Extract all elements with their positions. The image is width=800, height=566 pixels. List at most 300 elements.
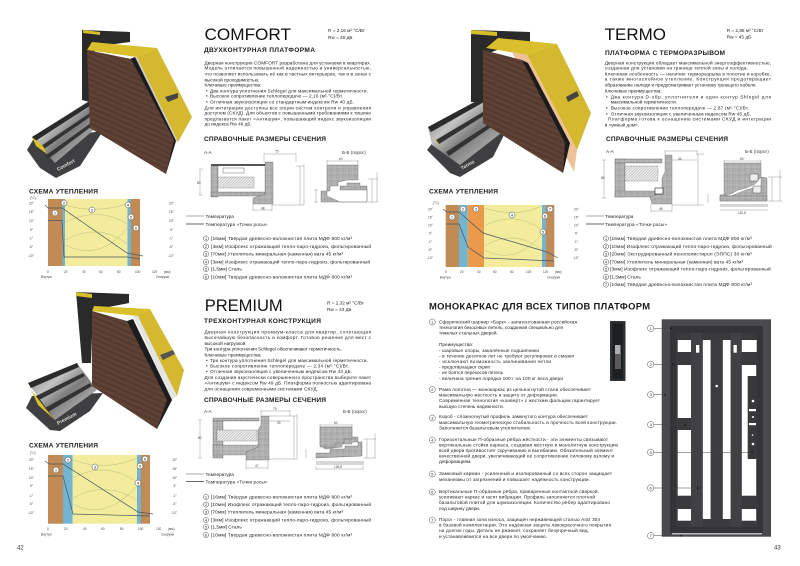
section drawing B-B threshold: 60 bbox=[334, 421, 338, 425]
layers list: 5 bbox=[205, 266, 208, 272]
numbered descriptions: Рама полотна — монокаркас из цельногнутой стали обеспечивает bbox=[439, 386, 592, 392]
door cutaway photo: COMFORT: Comfort bbox=[56, 158, 76, 173]
insulation chart: 5° bbox=[174, 484, 177, 488]
insulation chart: -5° bbox=[574, 248, 579, 252]
section drawing A-A: 79 bbox=[273, 407, 277, 411]
layers list: 2 bbox=[205, 502, 208, 507]
layers list: [10мм] Твёрдая древесно-волокнистая плита МДФ 800 кг/м³ bbox=[211, 275, 352, 281]
description text: Ключевая особенность — наличие терморазрыва в полотне и коробке, bbox=[605, 72, 771, 76]
numbered descriptions: высшую степень надежности. bbox=[439, 404, 504, 409]
section drawing B-B threshold: 116,8 bbox=[738, 211, 746, 215]
layers list: 5 bbox=[605, 266, 608, 272]
insulation chart: Внутри bbox=[41, 532, 52, 536]
numbered descriptions: Вертикальные П-образные рёбра, приваренные контактной сваркой, bbox=[439, 488, 599, 494]
layers list: [10мм] Изофлекс отражающий тепло-паро-гидроиз, фольгированный bbox=[610, 243, 772, 250]
section heading: СПРАВОЧНЫЕ РАЗМЕРЫ СЕЧЕНИЯ bbox=[204, 136, 326, 143]
insulation chart: 4 bbox=[137, 480, 140, 486]
insulation chart: 15° bbox=[169, 210, 175, 214]
insulation chart: 15° bbox=[574, 216, 580, 220]
thermal and acoustic values: Rw = 45 дБ bbox=[727, 34, 751, 40]
insulation chart: 6 bbox=[144, 456, 147, 462]
layers list bbox=[203, 236, 371, 281]
numbered descriptions: деформациям. bbox=[439, 459, 472, 464]
insulation chart: 40 bbox=[83, 527, 87, 531]
section drawing B-B threshold: 60 bbox=[339, 157, 343, 161]
section drawing B-B threshold: Б-Б (порог) bbox=[745, 149, 769, 154]
description text: Для интеграции доступны все опции систем контроля и управления bbox=[204, 106, 371, 110]
layers list: [10мм] Твёрдая древесно-волокнистая плита МДФ 800 кг/м³ bbox=[211, 533, 352, 539]
insulation chart: 20° bbox=[428, 208, 434, 212]
insulation chart: 2 bbox=[462, 206, 465, 212]
numbered descriptions: в базовой комплектации. Это надёжная защита лакокрасочного покрытия bbox=[439, 522, 611, 528]
insulation chart: 1 bbox=[54, 210, 57, 216]
description text: • bbox=[206, 358, 208, 363]
numbered descriptions: Порог - главная зона износа, защищён нержавеющей сталью AISI 304 bbox=[439, 516, 600, 522]
layers list: 1 bbox=[205, 236, 208, 241]
callouts: 5 bbox=[650, 450, 653, 455]
insulation chart: 20° bbox=[29, 458, 35, 462]
layers list: 3 bbox=[605, 252, 608, 256]
legend bbox=[186, 214, 268, 227]
insulation chart: Снаружи bbox=[156, 275, 169, 279]
layers list: [70мм] Утеплитель минеральная (каменная) вата 45 кг/м³ bbox=[211, 510, 343, 516]
insulation chart: -5° bbox=[169, 245, 174, 249]
description text: • bbox=[606, 106, 608, 110]
section heading: СПРАВОЧНЫЕ РАЗМЕРЫ СЕЧЕНИЯ bbox=[204, 397, 326, 404]
legend bbox=[586, 214, 667, 227]
description text: Высокое сопротивление теплопередаче — 2,87 (м²·°C)/Вт. bbox=[611, 106, 749, 110]
insulation chart: -1° bbox=[29, 236, 34, 240]
insulation chart: (°C) bbox=[30, 451, 36, 455]
insulation chart: 15° bbox=[172, 467, 178, 471]
section drawing B-B threshold bbox=[306, 409, 376, 470]
insulation chart: 15° bbox=[29, 467, 35, 471]
insulation chart: -1° bbox=[428, 240, 433, 244]
panel: PREMIUM platform bbox=[17, 292, 376, 552]
numbered descriptions: - в течение десятков лет не требуют регулировок и смазки bbox=[439, 354, 574, 358]
insulation chart bbox=[427, 201, 580, 280]
numbered descriptions: тяжелых стальных дверей. bbox=[439, 330, 498, 336]
section drawing B-B threshold: 126,8 bbox=[334, 465, 342, 469]
insulation chart: Внутри bbox=[41, 275, 52, 279]
insulation chart: (мм) bbox=[168, 527, 175, 531]
section drawing B-B threshold bbox=[314, 150, 378, 202]
insulation chart: 5 bbox=[130, 214, 133, 220]
description text: в «умный дом». bbox=[605, 122, 639, 128]
description text: Два контура уплотнения Schlegel для максимальной герметичности. bbox=[210, 88, 368, 94]
door cutaway photo: TERMO: Termo bbox=[460, 159, 476, 172]
door cutaway photo: PREMIUM bbox=[26, 292, 184, 431]
legend bbox=[186, 472, 268, 484]
description text: Отличная звукоизоляция с увеличенным индексом Rw 43 дБ. bbox=[210, 369, 352, 374]
description text: • bbox=[606, 94, 608, 100]
description text: Для создания акустически совершенного пространства выберите пакет bbox=[204, 375, 372, 380]
numbered descriptions: Короб - сложногнутый профиль замкнутого контура обеспечивает bbox=[439, 413, 589, 419]
numbered descriptions: всей двери противостоят скручиванию и выгибанию. Обязательный элемент bbox=[439, 447, 614, 453]
title: TERMO bbox=[605, 25, 666, 44]
insulation chart: 20° bbox=[172, 458, 178, 462]
insulation chart: 3 bbox=[94, 464, 97, 470]
insulation chart: (°C) bbox=[433, 201, 439, 205]
section drawing A-A: 47 bbox=[255, 464, 259, 468]
insulation chart: 10° bbox=[29, 219, 35, 223]
layers list: [1,5мм] Сталь bbox=[211, 525, 242, 531]
subtitle: ТРЕХКОНТУРНАЯ КОНСТРУКЦИЯ bbox=[204, 318, 321, 325]
description text: доступом (СКУД). Для объектов с повышенными требованиями к тишине bbox=[204, 110, 371, 116]
numbered descriptions: - исключают возможность заклинивания петли bbox=[439, 359, 551, 364]
insulation chart: 20° bbox=[574, 208, 580, 212]
thermal and acoustic values: Rw = 40 дБ bbox=[328, 35, 352, 40]
heading: insulation scheme: СХЕМА УТЕПЛЕНИЯ bbox=[429, 188, 498, 196]
section drawing A-A: 80 bbox=[198, 436, 202, 440]
insulation chart: 120 bbox=[156, 527, 162, 531]
insulation chart: -1° bbox=[574, 240, 579, 244]
insulation chart: -5° bbox=[172, 502, 177, 506]
thermal and acoustic values bbox=[727, 28, 764, 40]
legend: Температура bbox=[206, 214, 234, 219]
layers list: 4 bbox=[205, 260, 208, 264]
section drawing A-A: 44 bbox=[678, 157, 682, 161]
description text: Ключевые преимущества: bbox=[204, 352, 261, 358]
title: PREMIUM bbox=[205, 296, 283, 315]
section drawing A-A: 48 bbox=[659, 207, 663, 211]
layers list: [3мм] Изофлекс отражающий тепло-паро-гидроиз, фольгированный bbox=[211, 517, 371, 524]
section drawing A-A: А-А bbox=[606, 149, 615, 154]
numbered descriptions: 1 bbox=[431, 320, 434, 324]
panel: monoframe for all platforms bbox=[429, 300, 781, 552]
insulation chart: 100 bbox=[526, 270, 532, 274]
insulation chart: 10° bbox=[169, 219, 175, 223]
numbered descriptions: механизмы от загрязнений и повышает надёжность конструкции. bbox=[439, 476, 590, 482]
insulation chart: 60 bbox=[493, 270, 497, 274]
layers list bbox=[603, 236, 772, 288]
insulation chart: 120 bbox=[152, 270, 158, 274]
insulation chart: Снаружи bbox=[547, 276, 560, 280]
numbered descriptions: Горизонтальные П-образные рёбра жёсткости - эти элементы связывают bbox=[439, 437, 609, 442]
thermal and acoustic values bbox=[327, 300, 365, 312]
description text: • bbox=[206, 94, 208, 98]
section drawing A-A: 80 bbox=[197, 181, 201, 185]
numbered descriptions: под ширину двери. bbox=[439, 506, 480, 511]
insulation chart: 60 bbox=[101, 527, 105, 531]
section drawing A-A: А-А bbox=[204, 150, 213, 155]
layers list: 1 bbox=[605, 236, 608, 241]
description text: «Антишум» с индексом Rw 49 дБ. Платформа полностью адаптирована bbox=[204, 380, 371, 386]
callouts: 3 bbox=[650, 392, 653, 397]
description text: • bbox=[606, 112, 608, 116]
legend: Температура bbox=[206, 472, 234, 477]
description text bbox=[204, 60, 372, 126]
subtitle: ДВУХКОНТУРНАЯ ПЛАТФОРМА bbox=[204, 47, 315, 54]
description text: предлагается пакет «Антишум», повышающий индекс звукоизоляции bbox=[204, 116, 371, 122]
numbered descriptions: 3 bbox=[431, 416, 434, 420]
callouts: 7 bbox=[650, 533, 653, 538]
insulation chart: -10° bbox=[28, 511, 35, 515]
layers list: [20мм] Экструдированный пенополистирол (ЭППС) 30 кг/м³ bbox=[610, 251, 752, 258]
description text: Дверная конструкция премиум-класса для квартир, сочетающая bbox=[204, 330, 371, 334]
insulation chart: -5° bbox=[428, 248, 433, 252]
door cutaway photo: TERMO bbox=[427, 30, 591, 177]
numbered descriptions: базальтовой плитой для шумоизоляции. Количество рёбер адаптировано bbox=[439, 499, 610, 505]
insulation chart: 5 bbox=[139, 464, 142, 468]
callouts: 6 bbox=[650, 486, 653, 490]
numbered descriptions: максимальную геометрическую стабильность и прочность всей конструкции. bbox=[439, 419, 617, 425]
description text: образование наледи и предусматривает установку греющего кабеля. bbox=[605, 82, 757, 88]
insulation chart: Внутри bbox=[440, 276, 451, 280]
description text: Дверная конструкция COMFORT разработана для установки в квартирах. bbox=[204, 60, 371, 66]
insulation chart: 6 bbox=[135, 226, 138, 230]
thermal and acoustic values: Rw = 43 дБ bbox=[327, 307, 351, 312]
section heading: СПРАВОЧНЫЕ РАЗМЕРЫ СЕЧЕНИЯ bbox=[606, 136, 728, 143]
numbered descriptions: Сферический шарнир «Барк» - запатентованная российская bbox=[439, 318, 577, 324]
numbered descriptions: усиливают каркас и гасят вибрации. Профиль заполняется плотной bbox=[439, 494, 595, 500]
numbered descriptions: Преимущества: bbox=[439, 342, 473, 347]
numbered descriptions: максимальную жесткость и защиту от деформации. bbox=[439, 392, 558, 398]
layers list: [1,5мм] Сталь bbox=[211, 267, 242, 273]
layers list: 3 bbox=[205, 252, 208, 256]
insulation chart: 4 bbox=[511, 212, 514, 218]
description text: Ключевые преимущества: bbox=[204, 82, 261, 88]
numbered descriptions: вертикальные стойки каркаса, создавая жёсткую и монолитную конструкцию bbox=[439, 442, 618, 448]
insulation chart: 2 bbox=[67, 458, 70, 462]
insulation chart: 2 bbox=[63, 200, 66, 206]
description text bbox=[605, 60, 772, 128]
door frame diagram bbox=[662, 319, 771, 537]
section drawing A-A: 75 bbox=[275, 150, 279, 154]
layers list: 6 bbox=[205, 532, 208, 538]
insulation chart: -5° bbox=[29, 502, 34, 506]
numbered descriptions: 4 bbox=[431, 438, 434, 442]
layers list bbox=[203, 494, 371, 539]
insulation chart: 15° bbox=[29, 210, 35, 214]
icon: hinge photo bbox=[610, 321, 626, 381]
description text: до индекса Rw 49 дБ. bbox=[204, 122, 252, 126]
insulation chart: 100 bbox=[138, 527, 144, 531]
insulation chart: 15° bbox=[428, 216, 434, 220]
description text: • bbox=[206, 100, 208, 104]
section drawing A-A bbox=[197, 150, 304, 211]
description text: Отличная звукоизоляция со стандартным индексом Rw 40 дБ. bbox=[210, 100, 354, 104]
insulation chart: 5° bbox=[30, 484, 34, 488]
description text: • bbox=[206, 369, 208, 374]
thermal and acoustic values: R = 2,85 м² °C/Вт bbox=[727, 28, 764, 33]
section drawing A-A bbox=[601, 149, 704, 212]
layers list: [3мм] Изофлекс отражающий тепло-паро-гидроиз, фольгированный bbox=[211, 259, 370, 266]
layers list: [70мм] Утеплитель минеральная (каменная) вата 45 кг/м³ bbox=[211, 252, 343, 258]
description text: • bbox=[206, 364, 208, 368]
insulation chart: -1° bbox=[169, 236, 174, 240]
insulation chart: 20 bbox=[460, 270, 464, 274]
description text: Высокое сопротивление теплопередаче — 2,16 (м²·°C)/Вт. bbox=[210, 94, 343, 98]
numbered descriptions: 5 bbox=[431, 472, 434, 476]
insulation chart: -10° bbox=[171, 511, 178, 515]
insulation chart: 5° bbox=[429, 232, 433, 236]
insulation chart: 7 bbox=[549, 206, 552, 212]
layers list: 7 bbox=[605, 282, 608, 287]
thermal and acoustic values: R = 2,16 м² °C/Вт bbox=[328, 28, 366, 33]
insulation chart: 5° bbox=[575, 232, 579, 236]
callouts: 4 bbox=[650, 422, 653, 427]
layers list: [1,5мм] Сталь bbox=[610, 275, 641, 281]
heading: МОНОКАРКАС ДЛЯ ВСЕХ ТИПОВ ПЛАТФОРМ bbox=[429, 300, 650, 312]
insulation chart: 10° bbox=[172, 476, 178, 480]
numbered descriptions: технология безосевых петель, созданная специально для bbox=[439, 325, 563, 330]
insulation chart: -10° bbox=[28, 254, 35, 258]
insulation chart: (мм) bbox=[164, 270, 171, 274]
layers list: [16мм] Твёрдая древесно-волокнистая плита МДФ 800 кг/м³ bbox=[211, 236, 352, 242]
insulation chart: 3 bbox=[91, 208, 94, 212]
numbered descriptions: и устанавливается на все двери по умолчанию. bbox=[439, 534, 547, 539]
description text bbox=[204, 330, 372, 392]
insulation chart: 10° bbox=[574, 224, 580, 228]
insulation chart: 1 bbox=[55, 468, 58, 472]
callouts: 1 bbox=[650, 326, 653, 331]
legend: Температура bbox=[605, 214, 634, 219]
numbered descriptions: качественной двери, увеличивающий её сопротивление силовому взлому и bbox=[439, 452, 614, 458]
numbered descriptions: - не боятся перекосов петель bbox=[439, 370, 504, 375]
insulation chart: -10° bbox=[168, 254, 175, 258]
insulation chart: (°C) bbox=[30, 196, 36, 200]
insulation chart: 100 bbox=[135, 270, 141, 274]
layers list: 2 bbox=[205, 244, 208, 249]
insulation chart: 20° bbox=[169, 202, 175, 206]
layers list: 2 bbox=[605, 244, 608, 249]
insulation chart: -10° bbox=[573, 256, 580, 260]
layers list: [16мм] Твёрдая древесно-волокнистая плита МДФ 800 кг/м³ bbox=[211, 495, 352, 501]
insulation chart: 40 bbox=[82, 270, 86, 274]
description text: высочайшую безопасность и комфорт. Готовое решение для мест с bbox=[204, 334, 372, 340]
layers list: [3мм] Изофлекс отражающий тепло-паро-гидроиз, фольгированный bbox=[610, 266, 771, 273]
section drawing A-A: 48 bbox=[261, 206, 265, 210]
section drawing B-B threshold: 60 bbox=[740, 157, 744, 161]
numbered descriptions: Замковый карман - усиленный и изолированный со всех сторон защищает bbox=[439, 470, 613, 476]
layers list: [16мм] Твёрдая древесно-волокнистая плита МДФ 800 кг/м³ bbox=[610, 236, 752, 242]
insulation chart: 5 bbox=[542, 230, 545, 234]
description text: Три контура уплотнения Schlegel для максимальной герметичности. bbox=[210, 357, 368, 363]
panel: COMFORT platform bbox=[27, 25, 378, 281]
layers list: [10мм] Твёрдая древесно-волокнистая плита МДФ 800 кг/м³ bbox=[610, 282, 752, 288]
numbered descriptions: - предотвращают скрип bbox=[439, 364, 491, 370]
insulation chart: (мм) bbox=[555, 270, 562, 274]
section drawing A-A: 80 bbox=[601, 176, 605, 180]
section drawing B-B threshold bbox=[708, 149, 782, 215]
panel: TERMO platform bbox=[427, 25, 782, 288]
description text: Дверная конструкция обладает максимальной энергоэффективностью, bbox=[605, 60, 771, 66]
insulation chart: 80 bbox=[120, 527, 124, 531]
layers list: 5 bbox=[205, 524, 208, 530]
numbered descriptions: 7 bbox=[431, 518, 434, 522]
description text: Модель отличается повышенной надежностью и универсальностью, bbox=[204, 64, 371, 70]
section drawing A-A: 39 bbox=[277, 421, 281, 425]
page number 43: 43 bbox=[774, 546, 781, 552]
insulation chart: 5° bbox=[170, 228, 174, 232]
description text: Три контура уплотнения Schlegel обеспечивают герметичность. bbox=[204, 346, 342, 352]
description text: созданная для установки на границе теплой зоны и холода. bbox=[605, 64, 748, 70]
numbered descriptions bbox=[429, 318, 618, 539]
insulation chart: -1° bbox=[29, 494, 34, 498]
layers list: [3мм] Изофлекс отражающий тепло-паро-гидроиз, фольгированный bbox=[211, 243, 371, 250]
layers list: [70мм] Утеплитель минеральная (каменная) вата 45 кг/м³ bbox=[610, 260, 743, 266]
legend: Температура «Точки росы» bbox=[605, 222, 667, 227]
insulation chart: 10° bbox=[29, 476, 35, 480]
description text: для оснащения современными системами СКУД. bbox=[204, 386, 318, 392]
numbered descriptions: на долгие годы. Деталь не ржавеет, сохраняет безупречный вид, bbox=[439, 527, 589, 533]
callouts: 2 bbox=[650, 362, 653, 367]
legend: Температура «Точки росы» bbox=[206, 480, 268, 484]
description text: высокой нагрузкой. bbox=[204, 340, 247, 346]
insulation chart: 60 bbox=[99, 270, 103, 274]
layers list: 6 bbox=[205, 274, 208, 280]
description text: Два контура D-обр. уплотнителя и один контур Shlegel для bbox=[611, 94, 771, 100]
door cutaway photo: COMFORT bbox=[27, 30, 192, 178]
insulation chart: Снаружи bbox=[161, 532, 174, 536]
door cutaway photo: PREMIUM: Premium bbox=[56, 411, 78, 427]
numbered descriptions: Заполняется базальтовым утеплителем. bbox=[439, 426, 531, 430]
insulation chart: 40 bbox=[477, 270, 481, 274]
section drawing A-A bbox=[198, 407, 297, 469]
insulation chart: 0 bbox=[445, 270, 447, 274]
insulation chart: 1 bbox=[451, 214, 454, 220]
insulation chart: 20 bbox=[64, 527, 68, 531]
numbered descriptions: 6 bbox=[431, 490, 434, 494]
heading: insulation scheme: СХЕМА УТЕПЛЕНИЯ bbox=[29, 188, 98, 196]
insulation chart: 10° bbox=[428, 224, 434, 228]
thermal and acoustic values bbox=[328, 28, 366, 40]
description text: • bbox=[206, 88, 208, 94]
legend: Температура «Точки росы» bbox=[206, 222, 268, 227]
section drawing B-B threshold: Б-Б (порог) bbox=[342, 150, 366, 155]
numbered descriptions: - величина трения порядка 100 г на 100 кг веса двери bbox=[439, 376, 563, 381]
numbered descriptions: - шаровые опоры, закалённые подшипники bbox=[439, 348, 539, 353]
insulation chart: 20° bbox=[29, 202, 35, 206]
description text: Отличная звукоизоляция с увеличенным индексом Rw 45 дБ. bbox=[611, 112, 751, 116]
insulation chart: 20 bbox=[64, 270, 68, 274]
description text: что позволяет использовать её как в частных интерьерах, так и в зонах с bbox=[204, 72, 372, 76]
layers list: 4 bbox=[205, 518, 208, 522]
heading: insulation scheme: СХЕМА УТЕПЛЕНИЯ bbox=[29, 442, 98, 450]
section drawing A-A: А-А bbox=[204, 409, 213, 414]
title: COMFORT bbox=[204, 25, 291, 44]
insulation chart: 80 bbox=[510, 270, 514, 274]
description text: Ключевые преимущества: bbox=[605, 88, 662, 94]
insulation chart: 5° bbox=[30, 228, 34, 232]
description text: максимальной герметичности. bbox=[611, 98, 677, 104]
layers list: 1 bbox=[205, 494, 208, 500]
section drawing B-B threshold: Б-Б (порог) bbox=[343, 409, 367, 414]
layers list: [10мм] Изофлекс отражающий тепло-паро-гидроиз, фольгированный bbox=[211, 501, 371, 508]
insulation chart bbox=[28, 451, 178, 536]
subtitle: ПЛАТФОРМА С ТЕРМОРАЗРЫВОМ bbox=[605, 50, 726, 57]
insulation chart: 80 bbox=[117, 270, 121, 274]
insulation chart: 6 bbox=[544, 214, 547, 218]
insulation chart: 0 bbox=[47, 527, 49, 531]
description text: а также многослойное утепление. Конструкция предотвращает bbox=[605, 76, 772, 82]
layers list: 3 bbox=[205, 510, 208, 514]
thermal and acoustic values: R = 2,32 м² °C/Вт bbox=[327, 300, 365, 306]
insulation chart: 4 bbox=[127, 202, 130, 208]
insulation chart: 120 bbox=[543, 270, 549, 274]
numbered descriptions: 2 bbox=[431, 387, 434, 392]
insulation chart: -1° bbox=[172, 494, 177, 498]
insulation chart: -10° bbox=[427, 256, 434, 260]
page number 42: 42 bbox=[17, 546, 24, 552]
numbered descriptions: Современная технология «конверт» с жестким фальцем гарантирует bbox=[439, 398, 601, 403]
description text: высокой проходимостью. bbox=[204, 76, 259, 82]
description text: Платформа готова к оснащению системами СКУД и интеграции bbox=[608, 116, 771, 122]
callouts bbox=[648, 325, 753, 539]
insulation chart: 3 bbox=[475, 206, 478, 212]
insulation chart bbox=[28, 196, 175, 279]
